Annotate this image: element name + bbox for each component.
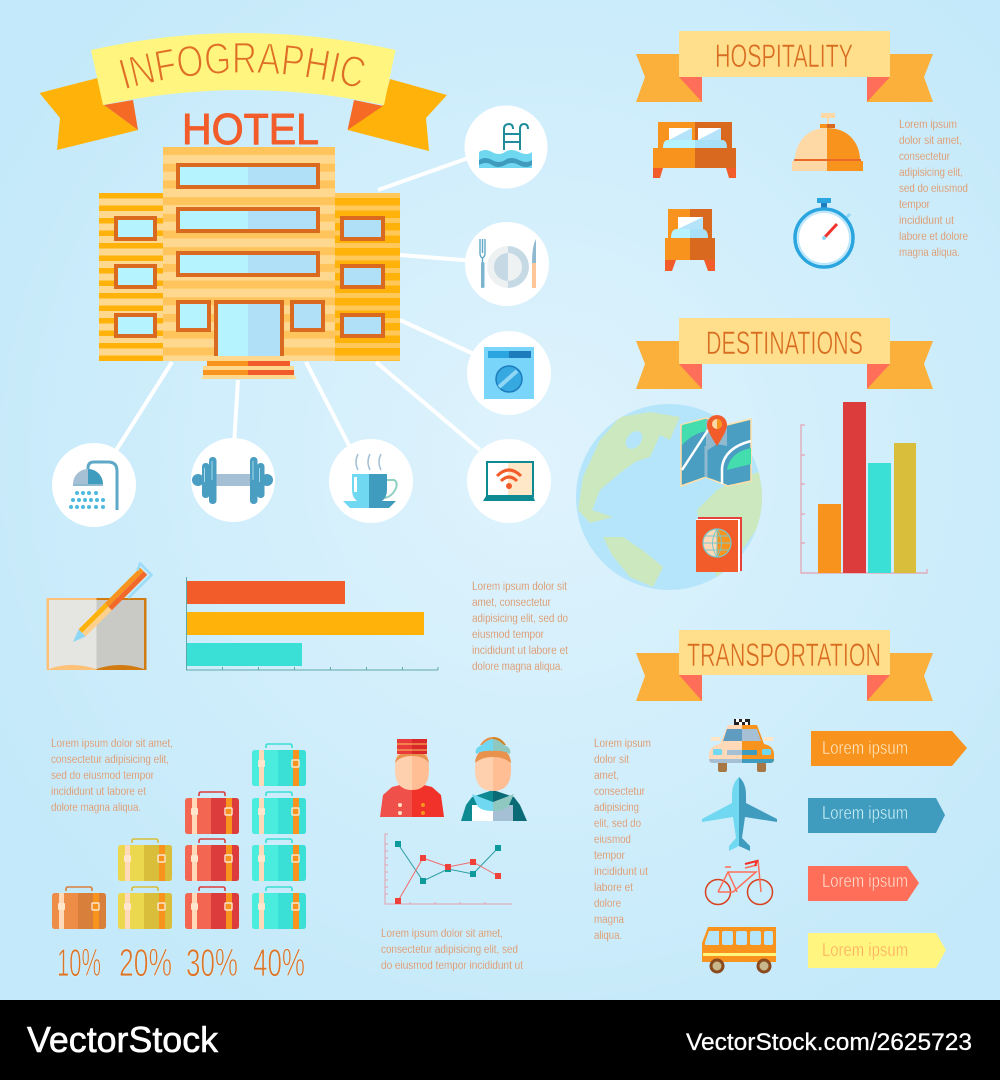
text block: bar chart: Lorem ipsum dolor sit [472,579,568,593]
icon: washing machine [467,331,551,415]
text block: transportation: incididunt ut [594,864,649,878]
icon: reception bell [792,113,863,171]
upper windows [116,165,383,362]
text block: transportation: amet, [594,768,619,782]
icon: single bed [665,209,715,271]
steps [201,356,297,379]
arrow label: yellow [808,933,946,968]
title ribbon [40,33,447,151]
line chart [385,834,512,904]
text block: hospitality: consectetur [899,149,950,163]
text block: hospitality: tempor [899,197,930,211]
heading: DESTINATIONS [706,325,863,361]
title text: INFOGRAPHIC [120,43,364,88]
ribbon: transportation [636,630,933,701]
text block: hospitality: incididunt ut [899,213,955,227]
text block: hospitality: magna aliqua. [899,245,960,259]
text block: staff: do eiusmod tempor incididunt ut [381,958,524,972]
heading: HOSPITALITY [715,38,853,74]
text block: luggage: Lorem ipsum dolor sit amet, [51,736,173,750]
icon: airplane [702,777,777,851]
icon: bicycle [706,860,772,904]
text block: luggage: incididunt ut labore et [51,784,147,798]
horizontal bar chart [186,577,438,670]
pin [707,415,727,446]
arrow label: coral [808,866,919,901]
text block: transportation: consectetur [594,784,645,798]
percentage labels: 10% [57,942,101,985]
luggage pictogram chart [52,744,306,929]
text block: hospitality: labore et dolore [899,229,968,243]
text block: hospitality [899,117,968,259]
heading: TRANSPORTATION [687,637,881,673]
text block: hospitality: Lorem ipsum [899,117,957,131]
icon: maid [461,737,527,821]
arrow label: orange: Lorem ipsum [822,738,908,758]
text block: hospitality: dolor sit amet, [899,133,962,147]
arrow label: blue: Lorem ipsum [822,803,908,823]
text block: luggage: dolore magna aliqua. [51,800,141,814]
text block: luggage: consectetur adipisicing elit, [51,752,169,766]
connector lines [110,156,480,460]
text block: transportation: tempor [594,848,625,862]
icon: book and pen [46,564,151,670]
icon: passport [696,517,742,572]
ribbon: destinations [636,318,933,389]
watermark url: VectorStock.com/2625723 [686,1029,972,1056]
globe [576,404,770,590]
text block: transportation: dolor sit [594,752,630,766]
hotel building [99,147,400,379]
text block: bar chart: dolore magna aliqua. [472,659,563,673]
text block: transportation: aliqua. [594,928,622,942]
icon: plate and cutlery [465,222,549,306]
icon: taxi [709,719,774,772]
icon: map with pin [681,415,751,486]
text block: transportation: labore et [594,880,634,894]
text block: transportation: adipisicing [594,800,639,814]
icon: shower [52,443,136,527]
text block: staff [381,926,524,972]
text block: luggage: sed do eiusmod tempor [51,768,154,782]
column chart [801,402,927,573]
icon: stopwatch [795,198,853,267]
icon: bellhop [380,739,444,817]
percentage labels [57,942,305,985]
icon: bus [702,927,776,972]
text block: staff: consectetur adipisicing elit, sed [381,942,518,956]
text block: transportation: Lorem ipsum [594,736,651,750]
percentage labels: 20% [119,942,172,985]
text block: transportation: magna [594,912,624,926]
text block: luggage [51,736,173,814]
percentage labels: 40% [253,942,305,985]
text block: bar chart: eiusmod tempor [472,627,544,641]
ribbon: hospitality [636,31,933,102]
text block: hospitality: sed do eiusmod [899,181,968,195]
watermark logo: VectorStock [27,1019,219,1060]
arrow label: coral: Lorem ipsum [822,871,908,891]
pen [67,564,151,648]
percentage labels: 30% [186,942,238,985]
text block: transportation [594,736,651,942]
text block: transportation: dolore [594,896,621,910]
icon: double bed [653,122,736,178]
text block: bar chart: incididunt ut labore et [472,643,569,657]
icon: dumbbell [191,438,275,522]
icon: coffee cup [329,439,413,523]
icon: swimming pool [464,106,548,188]
text block: staff: Lorem ipsum dolor sit amet, [381,926,503,940]
text block: bar chart: amet, consectetur [472,595,551,609]
arrow label: yellow: Lorem ipsum [822,940,908,960]
text block: bar chart: adipisicing elit, sed do [472,611,568,625]
text block: transportation: eiusmod [594,832,631,846]
text block: transportation: elit, sed do [594,816,641,830]
arrow label: orange [811,731,967,766]
arrow label: blue [808,798,945,833]
text block: hospitality: adipisicing elit, [899,165,963,179]
icon: laptop wifi [467,439,551,523]
footer bar [0,1000,1000,1080]
hotel heading: HOTEL [182,105,319,154]
text block: bar chart [472,579,569,673]
